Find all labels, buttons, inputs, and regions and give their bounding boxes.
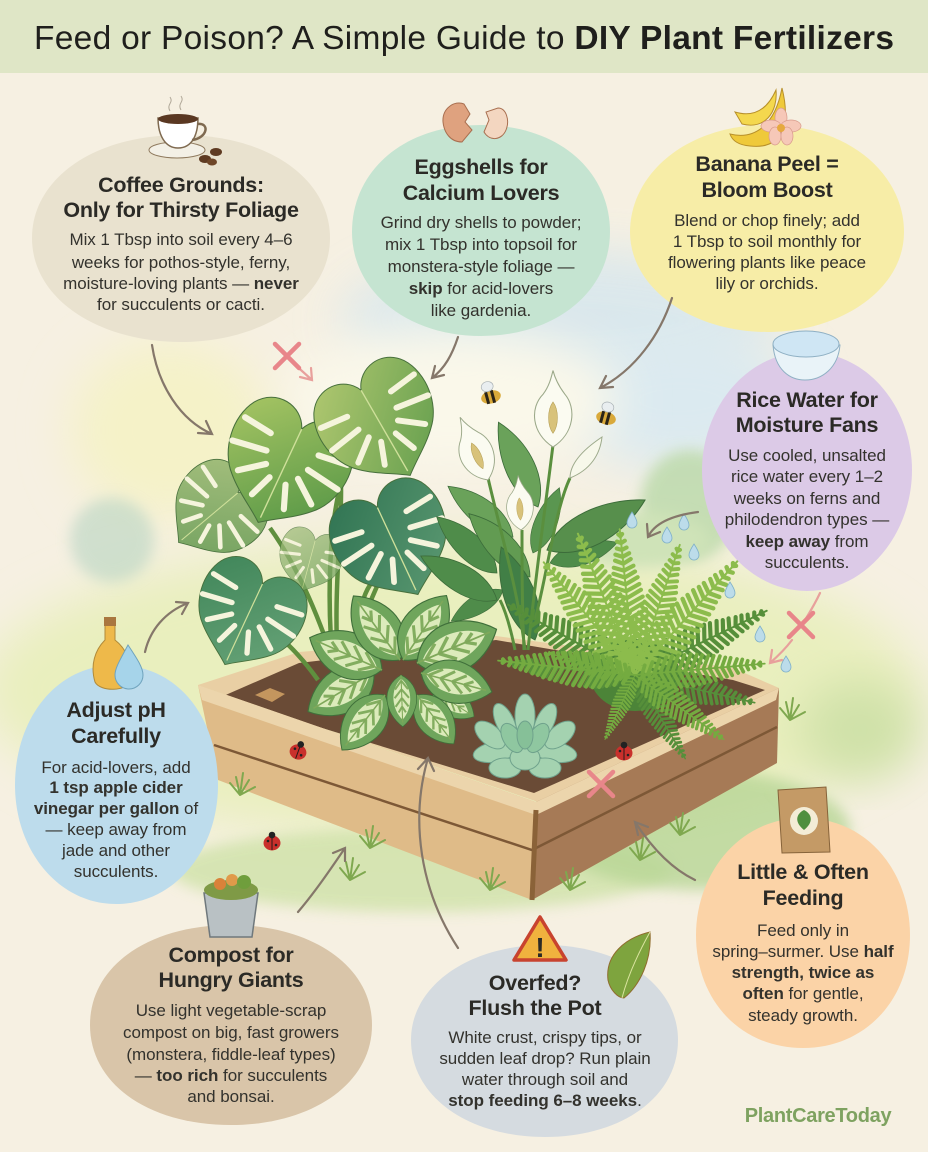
title band: Feed or Poison? A Simple Guide to DIY Plant Fertilizers [34, 20, 894, 57]
panel: little and often: often for gentle, [742, 984, 864, 1003]
monstera leaves [148, 345, 471, 687]
panel: overfed: water through soil and [461, 1070, 628, 1089]
water drops [627, 512, 791, 672]
icon: coffee cup [149, 96, 222, 166]
arrows [145, 298, 820, 948]
panel: little and often: strength, twice as [732, 963, 874, 982]
icon: warning triangle: ! [535, 932, 545, 963]
arrow: x to plant [292, 362, 312, 380]
variegated plant [297, 583, 506, 762]
panel: overfed: stop feeding 6–8 weeks. [448, 1091, 642, 1110]
panel: overfed: Flush the Pot [469, 996, 602, 1020]
panel: adjust pH: — keep away from [46, 820, 186, 839]
panel: rice water: Moisture Fans [736, 413, 879, 437]
arrow: compost to bed [298, 848, 345, 912]
panel: compost: (monstera, fiddle-leaf types) [126, 1045, 336, 1064]
panel: rice water: rice water every 1–2 [731, 467, 883, 486]
panel: banana peel: flowering plants like peace [668, 253, 866, 272]
panel: little and often: steady growth. [748, 1006, 858, 1025]
warning x marks [275, 344, 813, 796]
arrow: coffee to plant [152, 345, 212, 434]
panel: eggshells: Grind dry shells to powder; [381, 213, 581, 232]
icon: wilted leaf [608, 932, 650, 998]
panel: adjust pH: succulents. [74, 862, 158, 881]
panel: eggshells: skip for acid-lovers [409, 279, 553, 298]
panel: rice water: Use cooled, unsalted [728, 446, 886, 465]
icon: banana with flower [730, 88, 801, 146]
panel: rice water [702, 352, 912, 591]
panel: banana peel: Banana Peel = [695, 152, 839, 176]
panel: overfed [411, 945, 678, 1137]
panel: rice water: weeks on ferns and [733, 489, 880, 508]
panel: eggshells: Calcium Lovers [403, 181, 560, 205]
panel: banana peel: Bloom Boost [701, 178, 833, 202]
panel: rice water: philodendron types — [725, 510, 889, 529]
panel: coffee grounds: Coffee Grounds: [98, 173, 264, 197]
panel: little and often [696, 818, 910, 1048]
panel: eggshells [352, 125, 610, 336]
panel: banana peel: 1 Tbsp to soil monthly for [673, 232, 862, 251]
panel: eggshells: mix 1 Tbsp into topsoil for [385, 235, 577, 254]
icon: warning triangle [514, 917, 566, 963]
panel: eggshells: monstera-style foliage — [388, 257, 574, 276]
panel: compost: Hungry Giants [159, 968, 304, 992]
succulent [470, 694, 580, 778]
panel: overfed: White crust, crispy tips, or [448, 1028, 642, 1047]
panel: adjust pH: Carefully [71, 724, 161, 748]
panel: compost: Use light vegetable-scrap [136, 1001, 326, 1020]
arrow: rice to fern [647, 512, 698, 537]
ladybugs [264, 738, 632, 850]
panel: little and often: spring–surmer. Use half [712, 942, 894, 961]
panel: eggshells: like gardenia. [431, 301, 531, 320]
panel: adjust pH: For acid-lovers, add [41, 758, 191, 777]
arrow: eggshell to plant [432, 337, 458, 378]
panel: overfed: sudden leaf drop? Run plain [439, 1049, 651, 1068]
panel: adjust pH: Adjust pH [66, 698, 166, 722]
panel: compost [90, 925, 372, 1125]
arrow: banana to lily [600, 298, 672, 388]
panel: coffee grounds [32, 135, 330, 342]
icon: eggshells [443, 103, 508, 142]
panel: coffee grounds: Only for Thirsty Foliage [63, 198, 299, 222]
panel: little and often: Feed only in [757, 921, 849, 940]
panel: rice water: succulents. [765, 553, 849, 572]
panel: compost: — too rich for succulents [135, 1066, 327, 1085]
panel: overfed: Overfed? [489, 971, 581, 995]
panel: eggshells: Eggshells for [415, 155, 548, 179]
panel: adjust pH: vinegar per gallon of [34, 799, 198, 818]
panel: coffee grounds: for succulents or cacti. [97, 295, 265, 314]
raised bed [198, 636, 805, 900]
icon: rice bowl [773, 331, 840, 380]
panel: rice water: keep away from [745, 532, 869, 551]
peace lily [414, 371, 653, 650]
arrow: little to bed [635, 822, 695, 880]
panel: adjust pH [15, 665, 218, 904]
arrow: pH to plant [145, 602, 188, 652]
title band [0, 0, 928, 73]
panel: compost: Compost for [168, 943, 294, 967]
panel: adjust pH: 1 tsp apple cider [49, 778, 183, 797]
illustration: raised garden bed with plants [148, 345, 805, 900]
icon: vinegar bottle and drop [93, 617, 143, 689]
panel: banana peel [630, 125, 904, 332]
panel: little and often: Little & Often [737, 860, 869, 884]
panel: banana peel: lily or orchids. [715, 274, 819, 293]
panel: compost: compost on big, fast growers [123, 1023, 339, 1042]
panel: compost: and bonsai. [187, 1087, 275, 1106]
stems [270, 470, 395, 685]
arrow: overfed to soil [418, 758, 458, 948]
arrow: rice x to fern [770, 593, 820, 663]
panel: coffee grounds: Mix 1 Tbsp into soil every 4–6 [69, 230, 293, 249]
panel: coffee grounds: moisture-loving plants — never [63, 274, 299, 293]
panel: banana peel: Blend or chop finely; add [674, 211, 860, 230]
logo: PlantCareToday [745, 1105, 892, 1127]
panel: coffee grounds: weeks for pothos-style, ferny, [71, 253, 290, 272]
bees [477, 379, 620, 427]
fern [496, 527, 775, 765]
icon: compost bucket [204, 874, 258, 937]
panel: rice water: Rice Water for [736, 388, 879, 412]
panel: adjust pH: jade and other [61, 841, 170, 860]
panel: little and often: Feeding [763, 886, 843, 910]
icon: fertilizer bag [778, 787, 830, 853]
